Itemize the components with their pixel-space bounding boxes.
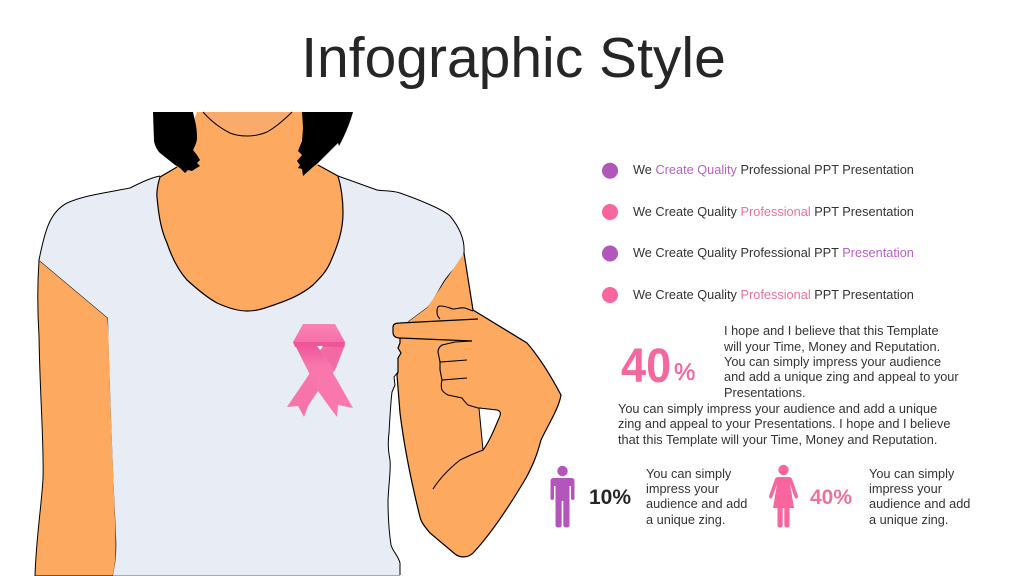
list item 1: We Create Quality Professional PPT Presentation: [633, 162, 914, 177]
shirt: [39, 165, 464, 575]
text block: women: audience and add: [869, 496, 970, 511]
hair right: [297, 112, 353, 176]
text block: beside stat: You can simply impress your audience: [724, 354, 941, 369]
stat: 40 percent: 40: [621, 340, 671, 393]
stat: 40 percent: %: [674, 359, 695, 386]
neckline outline: [157, 165, 343, 311]
text block: below stat: [618, 401, 950, 447]
list item 4: We Create Quality Professional PPT Presentation: [633, 286, 914, 302]
left arm: [35, 260, 116, 576]
icon: man: [550, 466, 574, 528]
thumb and fingers: [433, 306, 500, 489]
shirt hem: [113, 574, 400, 576]
elbow gap: [479, 408, 500, 450]
stat: 10 percent: 10%: [589, 486, 631, 509]
text block: men: audience and add: [646, 496, 747, 511]
title: Infographic Style: [301, 26, 726, 90]
text block: men: impress your: [646, 481, 719, 496]
list item 3: We Create Quality Professional PPT Presentation: [633, 245, 914, 260]
text block: women: a unique zing.: [869, 512, 948, 527]
text block: men: [646, 466, 747, 527]
chin: [195, 112, 302, 136]
neck and chest: [157, 112, 343, 311]
right arm: [393, 253, 561, 557]
shirt outline: [39, 176, 464, 575]
text block: below stat: zing and appeal to your Presentations. I hope and I believe: [618, 416, 950, 431]
illustration: woman pointing at ribbon: [35, 112, 561, 576]
text block: women: [869, 466, 970, 527]
text block: women: You can simply: [869, 466, 954, 481]
hair left: [153, 112, 200, 173]
stat: 40 percent women: 40%: [810, 486, 852, 509]
icon: pink ribbon: [287, 324, 353, 417]
icon: woman: [769, 465, 798, 528]
text block: below stat: You can simply impress your audience and add a unique: [618, 401, 937, 416]
bullet dots: [602, 163, 618, 303]
list item 2: We Create Quality Professional PPT Presentation: [633, 204, 914, 218]
text block: men: a unique zing.: [646, 512, 725, 527]
stat: 40 percent: [621, 340, 695, 393]
text block: beside stat: will your Time, Money and Reputation.: [724, 339, 940, 354]
text block: beside stat: and add a unique zing and appeal to your: [724, 369, 959, 384]
arm outline: [393, 253, 561, 557]
text block: beside stat: Presentations.: [724, 385, 806, 400]
text block: women: impress your: [869, 481, 942, 496]
text block: beside stat: [724, 323, 959, 400]
text block: beside stat: I hope and I believe that this Template: [724, 323, 939, 338]
text block: men: You can simply: [646, 466, 731, 481]
text block: below stat: that this Template will your Time, Money and Reputation.: [618, 432, 937, 447]
